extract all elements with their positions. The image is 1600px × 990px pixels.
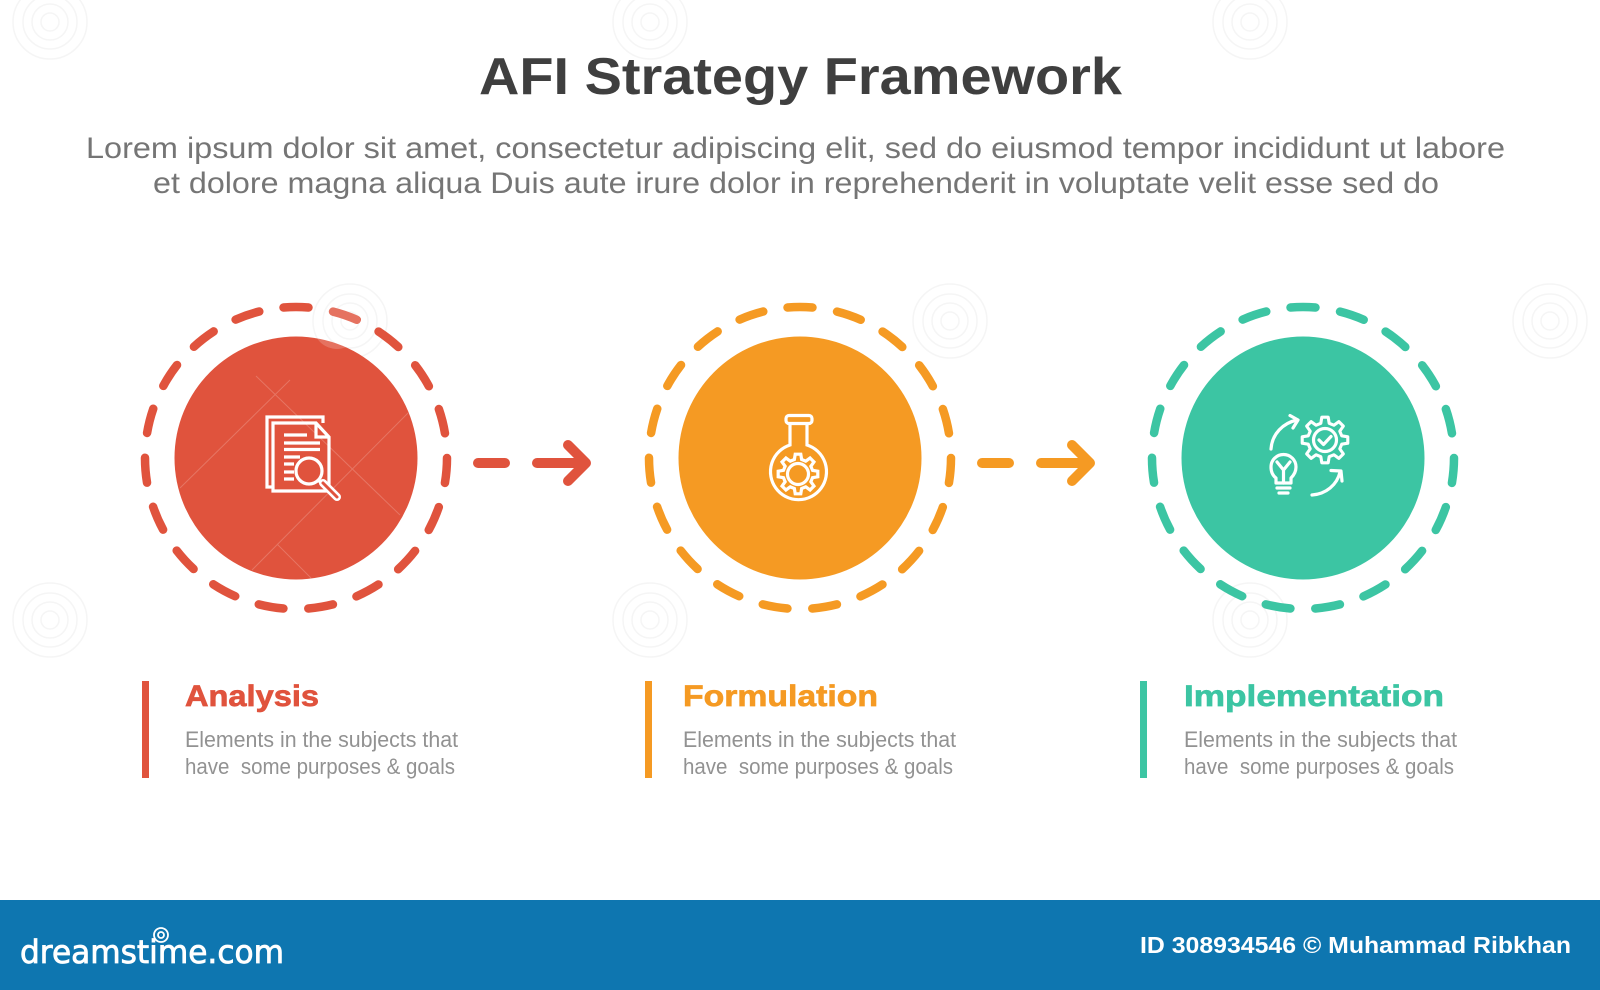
label: implementation <box>1140 680 1457 779</box>
footer bar <box>0 900 1600 990</box>
implementation dashed ring <box>1140 295 1466 621</box>
analysis filled circle <box>174 336 418 580</box>
arrow: formulation to implementation <box>982 445 1090 481</box>
panel: implementation <box>1140 295 1466 621</box>
panel: formulation <box>637 295 963 621</box>
icon: document with magnifier <box>267 417 337 497</box>
label: formulation <box>645 680 956 779</box>
label: analysis <box>142 680 458 779</box>
implementation filled circle <box>1182 336 1424 580</box>
formulation heading: Formulation <box>683 680 878 713</box>
icon: flask with gear <box>770 416 826 500</box>
panel: analysis <box>133 295 459 621</box>
formulation dashed ring <box>637 295 963 621</box>
implementation heading: Implementation <box>1184 680 1444 713</box>
analysis description <box>185 727 458 779</box>
arrow: analysis to formulation <box>478 445 586 481</box>
implementation description: have some purposes & goals <box>1184 754 1454 779</box>
implementation description <box>1184 727 1457 779</box>
icon: bulb, gear and cycle arrows <box>1271 416 1348 495</box>
formulation accent bar <box>645 681 652 778</box>
subtitle text block <box>86 132 1505 200</box>
formulation description: Elements in the subjects that <box>683 727 956 752</box>
subtitle text block: Lorem ipsum dolor sit amet, consectetur adipiscing elit, sed do eiusmod tempor incididunt ut labore <box>86 132 1505 165</box>
analysis description: have some purposes & goals <box>185 754 455 779</box>
analysis heading: Analysis <box>185 680 319 713</box>
footer logo: dreamstime.com <box>20 933 284 971</box>
implementation description: Elements in the subjects that <box>1184 727 1457 752</box>
subtitle text block: et dolore magna aliqua Duis aute irure dolor in reprehenderit in voluptate velit esse sed do <box>153 167 1439 200</box>
title: AFI Strategy Framework <box>479 48 1122 106</box>
analysis accent bar <box>142 681 149 778</box>
analysis dashed ring <box>133 295 459 621</box>
implementation accent bar <box>1140 681 1147 778</box>
formulation description: have some purposes & goals <box>683 754 953 779</box>
analysis description: Elements in the subjects that <box>185 727 458 752</box>
formulation description <box>683 727 956 779</box>
formulation filled circle <box>678 336 922 580</box>
footer image id and credit: ID 308934546 © Muhammad Ribkhan <box>1140 932 1571 958</box>
